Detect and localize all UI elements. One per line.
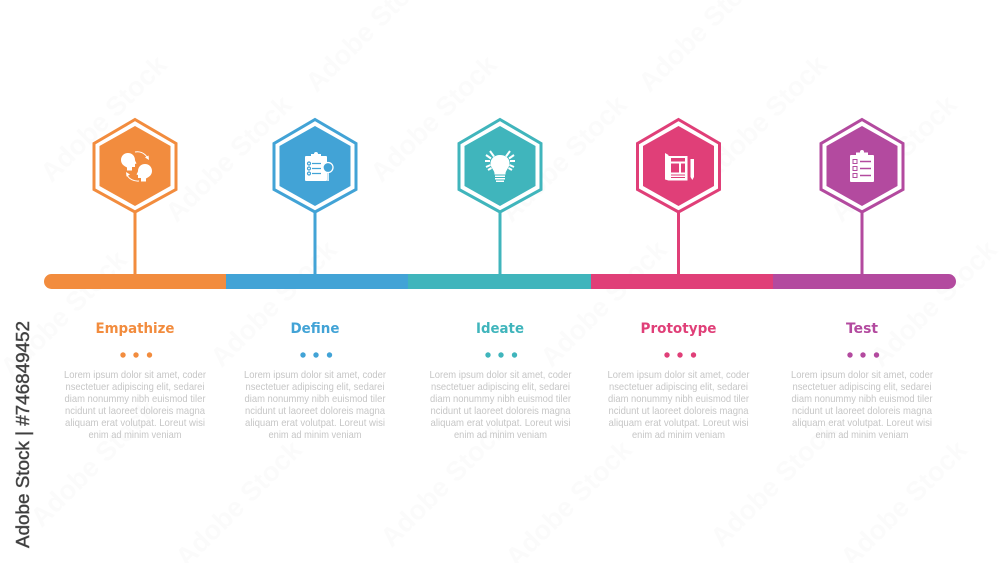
body text: nsectetuer adipiscing elit, sedarei xyxy=(792,381,932,393)
dots xyxy=(300,352,332,358)
watermark pattern: Adobe Stock xyxy=(365,49,503,188)
icon: blueprint and pencil xyxy=(665,153,694,180)
dots xyxy=(847,352,879,358)
body text: ncidunt ut laoreet doloreis magna xyxy=(65,405,205,417)
stem and hexagon xyxy=(638,120,720,275)
watermark pattern: Adobe Stock xyxy=(865,234,1000,373)
body text: diam nonummy nibh euismod tiler xyxy=(608,393,749,405)
watermark pattern: Adobe Stock xyxy=(25,394,163,533)
body text: nsectetuer adipiscing elit, sedarei xyxy=(609,381,748,393)
dots xyxy=(120,352,152,358)
timeline bar xyxy=(44,274,956,289)
dots xyxy=(485,352,517,358)
icon: clipboard with magnifier xyxy=(305,152,333,181)
panel: Test xyxy=(791,120,933,441)
body text: ncidunt ut laoreet doloreis magna xyxy=(245,405,385,417)
body text: Lorem ipsum dolor sit amet, coder xyxy=(791,369,933,381)
icon: two heads with arrows xyxy=(121,152,152,182)
watermark pattern: Adobe Stock xyxy=(160,89,298,228)
watermark pattern: Adobe Stock xyxy=(695,49,833,188)
stem and hexagon xyxy=(821,120,903,275)
body text: Lorem ipsum dolor sit amet, coder xyxy=(430,369,572,381)
watermark pattern: Adobe Stock xyxy=(375,414,513,553)
body text: aliquam erat volutpat. Loreut wisi xyxy=(608,417,748,429)
body text: Lorem ipsum dolor sit amet, coder xyxy=(608,369,750,381)
heading: Ideate xyxy=(476,321,524,337)
panel: Prototype xyxy=(608,120,750,441)
body text xyxy=(244,369,386,441)
watermark pattern: Adobe Stock xyxy=(535,234,673,373)
body text: enim ad minim veniam xyxy=(268,429,362,441)
body text xyxy=(608,369,750,441)
heading: Test xyxy=(846,321,878,337)
body text: nsectetuer adipiscing elit, sedarei xyxy=(431,381,570,393)
stem and hexagon xyxy=(459,120,541,275)
dots xyxy=(664,352,696,358)
watermark pattern: Adobe Stock xyxy=(205,234,343,373)
body text: aliquam erat volutpat. Loreut wisi xyxy=(65,417,205,429)
watermark pattern: Adobe Stock xyxy=(35,49,173,188)
body text: Lorem ipsum dolor sit amet, coder xyxy=(64,369,206,381)
body text: enim ad minim veniam xyxy=(454,429,547,441)
stock id side label: Adobe Stock | #746849452 xyxy=(12,321,33,548)
body text xyxy=(430,369,572,441)
panel: Define xyxy=(244,120,386,441)
body text: diam nonummy nibh euismod tiler xyxy=(64,393,206,405)
body text: Lorem ipsum dolor sit amet, coder xyxy=(244,369,386,381)
body text xyxy=(791,369,933,441)
body text: enim ad minim veniam xyxy=(632,429,725,441)
panel: Ideate xyxy=(430,120,572,441)
watermark pattern: Adobe Stock xyxy=(495,89,633,228)
panel: Empathize xyxy=(64,120,206,441)
body text: enim ad minim veniam xyxy=(88,429,182,441)
body text: ncidunt ut laoreet doloreis magna xyxy=(430,405,571,417)
watermark pattern: Adobe Stock xyxy=(705,414,843,553)
body text: ncidunt ut laoreet doloreis magna xyxy=(792,405,932,417)
body text: enim ad minim veniam xyxy=(816,429,909,441)
body text: nsectetuer adipiscing elit, sedarei xyxy=(66,381,204,393)
icon: checklist clipboard xyxy=(850,150,874,182)
heading: Empathize xyxy=(96,321,174,337)
stem and hexagon xyxy=(274,120,356,275)
body text: diam nonummy nibh euismod tiler xyxy=(430,393,571,405)
body text xyxy=(64,369,206,441)
heading: Prototype xyxy=(640,321,716,337)
body text: diam nonummy nibh euismod tiler xyxy=(244,393,386,405)
stem and hexagon xyxy=(94,120,176,275)
watermark pattern: Adobe Stock xyxy=(825,89,963,228)
body text: diam nonummy nibh euismod tiler xyxy=(792,393,933,405)
body text: ncidunt ut laoreet doloreis magna xyxy=(608,405,749,417)
heading: Define xyxy=(290,321,340,337)
body text: aliquam erat volutpat. Loreut wisi xyxy=(245,417,385,429)
body text: aliquam erat volutpat. Loreut wisi xyxy=(430,417,570,429)
body text: aliquam erat volutpat. Loreut wisi xyxy=(792,417,932,429)
body text: nsectetuer adipiscing elit, sedarei xyxy=(246,381,384,393)
icon: light bulb xyxy=(485,151,515,182)
